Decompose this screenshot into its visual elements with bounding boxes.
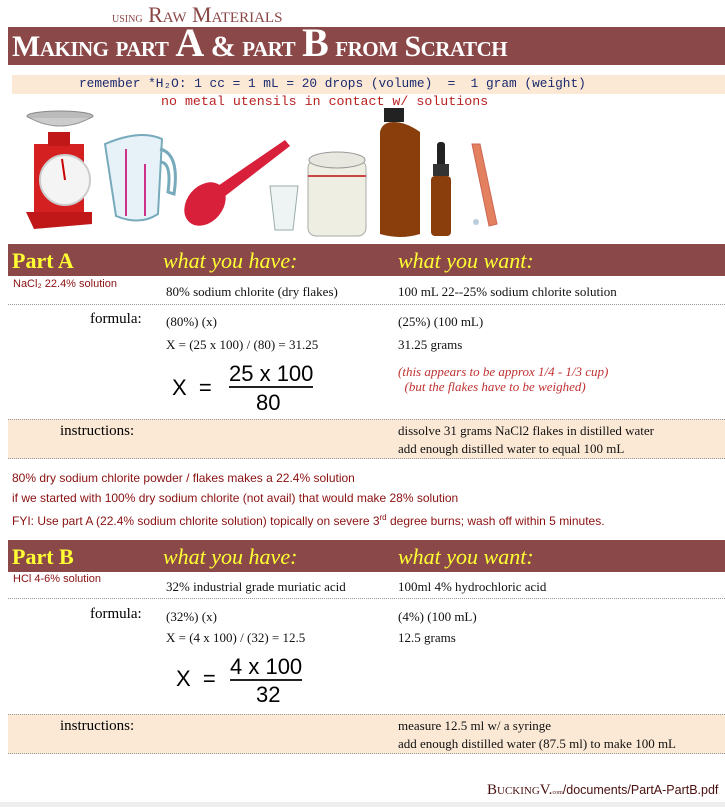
icon: syringe — [472, 144, 497, 226]
Part A instructions band — [8, 419, 725, 459]
Part A fraction — [172, 361, 313, 415]
Part B subtitle: HCl 4-6% solution — [13, 573, 101, 585]
notes — [12, 471, 605, 528]
Part B label: Part B — [12, 544, 74, 569]
Part A have: 80% sodium chlorite (dry flakes) — [166, 284, 338, 299]
Part B header band — [8, 540, 725, 572]
instructions text — [398, 423, 654, 456]
Part B fraction: 4 x 100 — [230, 654, 302, 679]
Part A fraction: 80 — [256, 390, 280, 415]
Part B instructions band — [8, 714, 725, 754]
instructions label: instructions: — [60, 423, 134, 439]
Part A want: 100 mL 22--25% sodium chlorite solution — [398, 284, 617, 299]
Part A result: (25%) (100 mL) — [398, 314, 483, 329]
notes: 80% dry sodium chlorite powder / flakes makes a 22.4% solution — [12, 471, 355, 485]
reminder band — [12, 75, 725, 94]
Part B result: (4%) (100 mL) — [398, 609, 477, 624]
column heading: have: what you have: — [163, 544, 297, 569]
footer: BuckingV.com/documents/PartA-PartB.pdf — [487, 782, 718, 798]
column heading: have: what you have: — [163, 248, 297, 273]
Part A note: (this appears to be approx 1/4 - 1/3 cup) — [398, 364, 608, 379]
Part B formula lines — [166, 609, 305, 645]
subtitle: using raw materials: using Raw Materials — [112, 2, 282, 27]
instructions text: dissolve 31 grams NaCl2 flakes in distilled water — [398, 423, 654, 438]
Part A note — [398, 364, 608, 394]
Part B result — [398, 609, 477, 645]
Part B result: 12.5 grams — [398, 630, 456, 645]
title band — [8, 27, 725, 65]
title: Making part A & part B from Scratch — [12, 20, 507, 65]
Part B formula lines: X = (4 x 100) / (32) = 12.5 — [166, 630, 305, 645]
Part A note: (but the flakes have to be weighed) — [404, 379, 586, 394]
column heading: want: what you want: — [398, 248, 534, 273]
icon: red spoon — [176, 140, 290, 234]
instructions text: add enough distilled water (87.5 ml) to make 100 mL — [398, 736, 676, 751]
Part B fraction: 32 — [256, 682, 280, 707]
Part A fraction: 25 x 100 — [229, 361, 313, 386]
icon: dropper bottle — [431, 142, 451, 236]
Part A formula lines: (80%) (x) — [166, 314, 217, 329]
Part A subtitle: NaCl₂ 22.4% solution — [13, 278, 117, 290]
Part A header band — [8, 244, 725, 276]
illustrations row — [26, 108, 498, 237]
Part B fraction — [176, 654, 302, 707]
Part A label: Part A — [12, 248, 74, 273]
reminder text: remember *H₂O: 1 cc = 1 mL = 20 drops (volume) = 1 gram (weight) — [79, 76, 586, 91]
Part B have: 32% industrial grade muriatic acid — [166, 579, 346, 594]
Part A formula lines: X = (25 x 100) / (80) = 31.25 — [166, 337, 318, 352]
notes: if we started with 100% dry sodium chlorite (not avail) that would make 28% solution — [12, 490, 458, 504]
warning text: no metal utensils in contact w/ solutions — [161, 94, 488, 109]
icon: glass jar — [308, 152, 366, 236]
icon: measuring cup — [105, 135, 175, 221]
Part A formula label: formula: — [90, 311, 142, 327]
Part A result — [398, 314, 483, 352]
Part A fraction: X = — [172, 375, 212, 400]
Part B want: 100ml 4% hydrochloric acid — [398, 579, 546, 594]
Part A formula lines — [166, 314, 318, 352]
instructions text: add enough distilled water to equal 100 mL — [398, 441, 624, 456]
instructions label: instructions: — [60, 718, 134, 734]
Part B formula lines: (32%) (x) — [166, 609, 217, 624]
instructions text — [398, 718, 676, 751]
icon: kitchen scale — [26, 111, 93, 229]
Part A result: 31.25 grams — [398, 337, 462, 352]
column heading: want: what you want: — [398, 544, 534, 569]
icon: amber bottle — [380, 108, 420, 237]
notes: FYI: Use part A (22.4% sodium chlorite solution) topically on severe 3rd degree burns; wash off within 5 minutes. — [12, 513, 605, 528]
instructions text: measure 12.5 ml w/ a syringe — [398, 718, 551, 733]
Part B formula label: formula: — [90, 606, 142, 622]
icon: shot glass — [270, 186, 298, 230]
Part B fraction: X = — [176, 666, 216, 691]
